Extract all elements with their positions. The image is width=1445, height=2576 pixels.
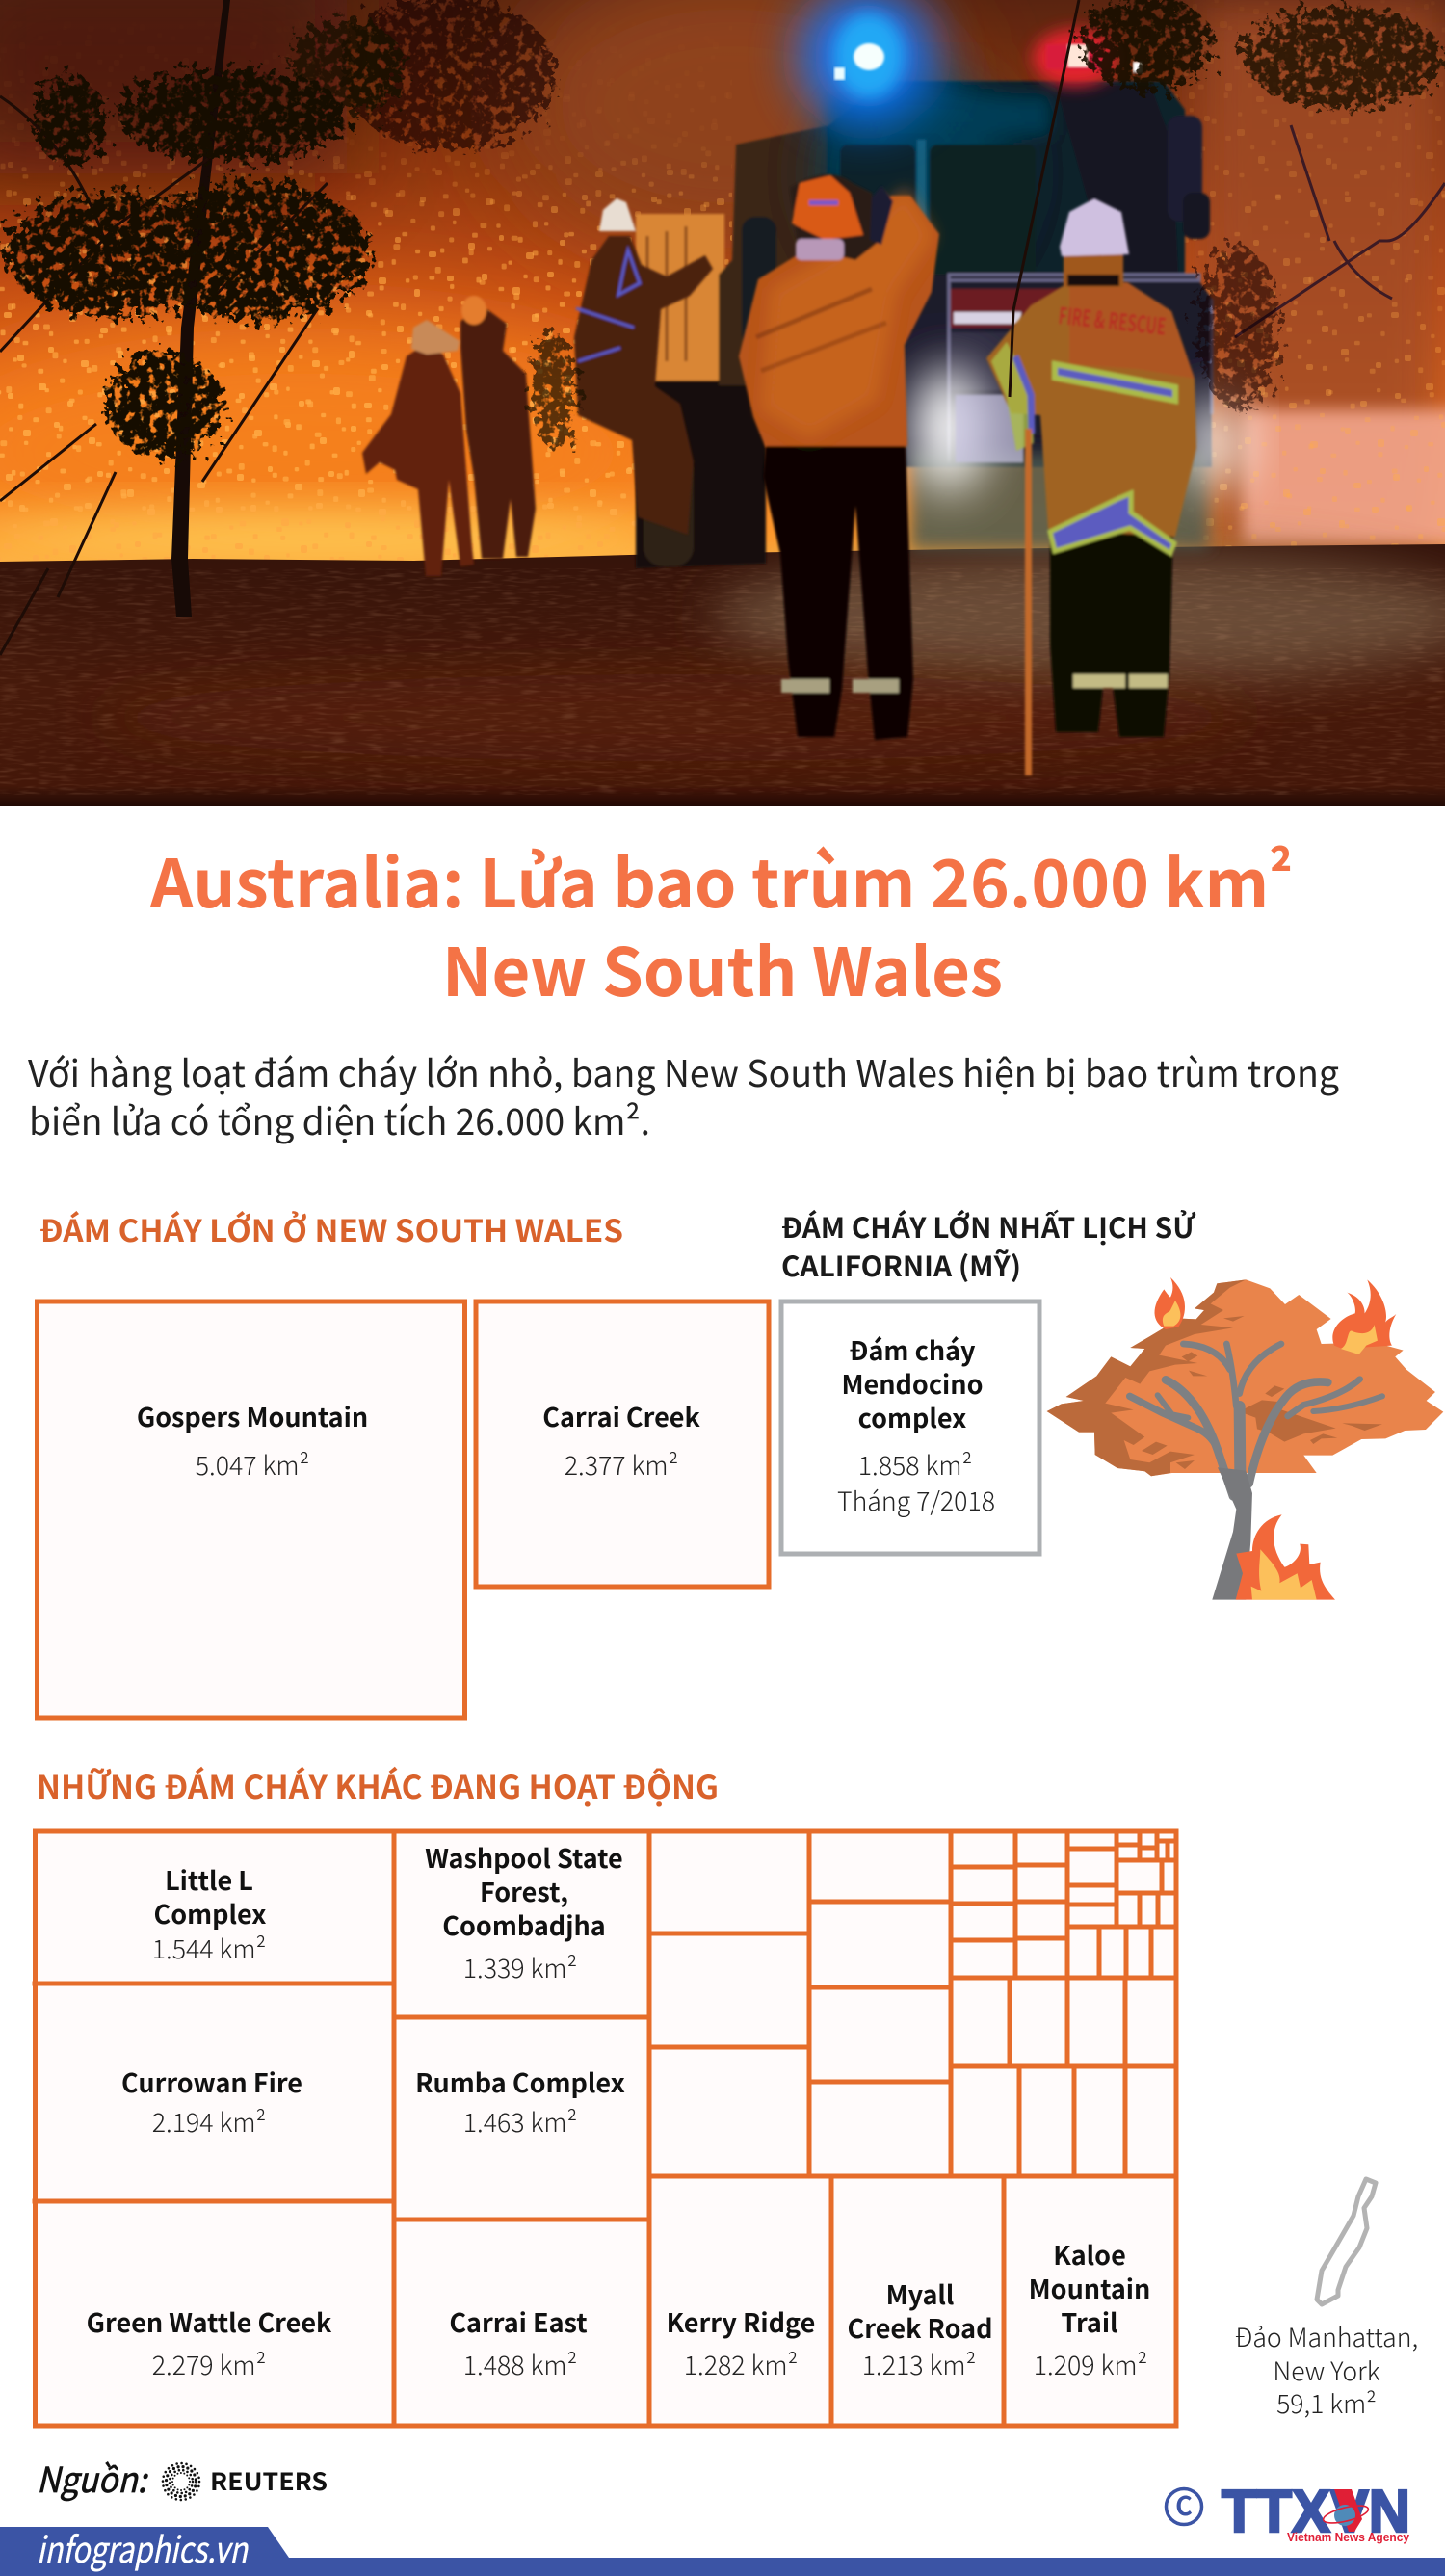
emergency lights: [798, 0, 1143, 125]
foreground firefighter: left: [739, 174, 939, 740]
cell: Green Wattle Creek: [87, 2302, 332, 2382]
background firefighters: [362, 296, 536, 576]
box: Gospers Mountain: [37, 1301, 464, 1718]
footer band: [0, 2521, 1445, 2576]
photo: firefighters in front of a bushfire: [0, 0, 1445, 806]
cell: Currowan Fire: [121, 2063, 302, 2140]
cell: Myall Creek Road: Myall: [886, 2274, 954, 2312]
foreground firefighter: right: FIRE & RESCUE: [1057, 297, 1168, 342]
cell: Currowan Fire: 2.194 km²: [152, 2102, 266, 2140]
cell: Kaloe Mountain Trail: [1029, 2235, 1150, 2382]
heading: California record: ĐÁM CHÁY LỚN NHẤT LỊCH SỬ: [781, 1206, 1196, 1247]
heading: California record: CALIFORNIA (MỸ): [781, 1245, 1021, 1285]
box: Mendocino complex: Đám cháy: [849, 1330, 976, 1368]
label: Manhattan island: New York: [1273, 2351, 1380, 2388]
intro text: [28, 1044, 1339, 1145]
source: Reuters: [37, 2453, 328, 2503]
cell: Little L Complex: 1.544 km²: [152, 1929, 266, 1966]
cell: Kaloe Mountain Trail: 1.209 km²: [1034, 2345, 1147, 2382]
cell: Carrai East: 1.488 km²: [463, 2345, 577, 2382]
source: Reuters: Nguồn:: [37, 2453, 148, 2503]
title: New South Wales: [442, 919, 1003, 1015]
label: Manhattan island: [1235, 2317, 1418, 2421]
cell: Kerry Ridge: 1.282 km²: [684, 2345, 798, 2382]
cell: Myall Creek Road: Creek Road: [848, 2308, 992, 2346]
cell: Washpool State Forest: Washpool State: [425, 1838, 623, 1876]
silhouette trees: [0, 0, 1445, 655]
source: Reuters: REUTERS: [210, 2463, 328, 2498]
cell: Little L Complex: [152, 1860, 266, 1966]
cell: Rumba Complex: Rumba Complex: [415, 2063, 625, 2100]
box: Mendocino complex: Tháng 7/2018: [837, 1481, 995, 1518]
ground: [0, 544, 1445, 806]
box: Mendocino complex: Mendocino: [842, 1364, 983, 1402]
cell: Kaloe Mountain Trail: Kaloe: [1053, 2235, 1126, 2273]
cell: Green Wattle Creek: Green Wattle Creek: [87, 2302, 332, 2340]
cell: Kaloe Mountain Trail: Mountain: [1029, 2269, 1150, 2306]
cell: Kaloe Mountain Trail: Trail: [1061, 2302, 1118, 2340]
cell: Rumba Complex: [415, 2063, 625, 2140]
logo: TTXVN: TTXVN: [1222, 2479, 1410, 2545]
cell: Myall Creek Road: 1.213 km²: [862, 2345, 976, 2382]
foreground firefighter: right: [986, 198, 1196, 775]
cell: Myall Creek Road: [848, 2274, 992, 2382]
cell: Kerry Ridge: [667, 2302, 815, 2382]
box: Carrai Creek: 2.377 km²: [565, 1445, 678, 1483]
cell: Little L Complex: Complex: [154, 1894, 266, 1932]
truck body: [636, 67, 1248, 568]
title: ²: [1269, 830, 1293, 911]
cell: Green Wattle Creek: 2.279 km²: [152, 2345, 266, 2382]
cell: Rumba Complex: 1.463 km²: [463, 2102, 577, 2140]
icon: Manhattan island outline: [1317, 2179, 1376, 2304]
label: Manhattan island: 59,1 km²: [1276, 2383, 1377, 2421]
box: Mendocino complex: 1.858 km²: [858, 1445, 972, 1483]
box: Gospers Mountain: Gospers Mountain: [137, 1397, 368, 1434]
heading: other active fires: NHỮNG ĐÁM CHÁY KHÁC ĐANG HOẠT ĐỘNG: [37, 1762, 719, 1808]
cell: Carrai East: Carrai East: [449, 2302, 588, 2340]
title: [149, 830, 1293, 1015]
cell: Washpool State Forest: 1.339 km²: [463, 1948, 577, 1985]
box: Gospers Mountain: 5.047 km²: [196, 1445, 309, 1483]
cell: Washpool State Forest: Coombadjha: [442, 1906, 606, 1943]
box: Carrai Creek: [476, 1301, 769, 1587]
footer band: infographics.vn: [37, 2521, 249, 2573]
cell: Carrai East: [449, 2302, 588, 2382]
intro text: Với hàng loạt đám cháy lớn nhỏ, bang New South Wales hiện bị bao trùm trong: [28, 1044, 1339, 1097]
logo: TTXVN: C: [1175, 2485, 1193, 2523]
box: Carrai Creek: Carrai Creek: [542, 1397, 700, 1434]
treemap: other active fires: [35, 1831, 1176, 2426]
heading: California record: [781, 1206, 1196, 1285]
title: Australia: Lửa bao trùm 26.000 km: [150, 830, 1265, 927]
label: Manhattan island: Đảo Manhattan,: [1235, 2317, 1418, 2354]
box: Mendocino complex: complex: [858, 1398, 966, 1435]
heading: large fires in New South Wales: ĐÁM CHÁY LỚN Ở NEW SOUTH WALES: [39, 1207, 623, 1251]
icon: burning tree: [1047, 1277, 1443, 1600]
climbing firefighter: [574, 198, 713, 535]
cell: Kerry Ridge: Kerry Ridge: [667, 2302, 815, 2340]
intro text: biển lửa có tổng diện tích 26.000 km².: [29, 1092, 650, 1145]
cell: Little L Complex: Little L: [165, 1860, 253, 1898]
cell: Washpool State Forest: Forest,: [480, 1872, 568, 1909]
cell: Washpool State Forest: [425, 1838, 623, 1985]
cell: Currowan Fire: Currowan Fire: [121, 2063, 302, 2100]
box: Mendocino complex: [781, 1301, 1039, 1554]
logo: TTXVN: Vietnam News Agency: [1287, 2530, 1410, 2544]
